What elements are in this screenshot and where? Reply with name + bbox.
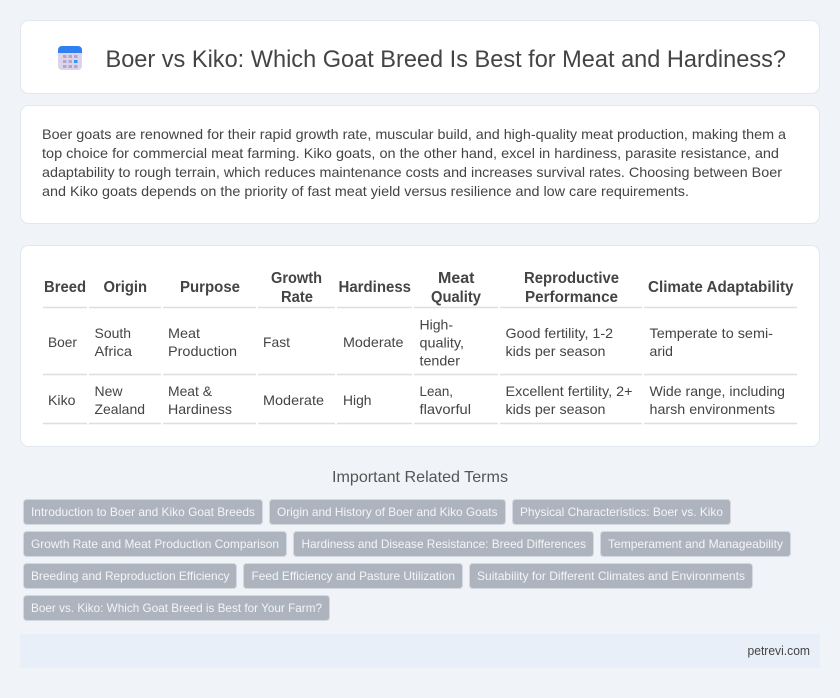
table row: Boer: Fast bbox=[263, 334, 290, 350]
footer source text: petrevi.com bbox=[748, 644, 810, 658]
table header: Quality bbox=[431, 289, 481, 306]
table row: Kiko: flavorful bbox=[420, 401, 471, 417]
text block: summary: Boer goats are renowned for their rapid growth rate, muscular build, and high-quality meat production, making them a bbox=[42, 126, 786, 142]
text block: summary: and Kiko goats depends on the priority of fast meat yield versus resilience and low care requirements. bbox=[42, 183, 689, 199]
icon: calendar bbox=[58, 46, 82, 70]
table row: Kiko bbox=[48, 383, 785, 417]
table row: Boer: Boer bbox=[48, 334, 77, 350]
table header: Origin bbox=[104, 279, 147, 296]
table row: Kiko: Lean, bbox=[420, 383, 453, 399]
table row: Boer: Moderate bbox=[343, 334, 404, 350]
table row: Kiko: High bbox=[343, 392, 372, 408]
tag list: related terms: Suitability for Different Climates and Environments bbox=[477, 569, 745, 583]
heading: related terms: Important Related Terms bbox=[332, 469, 508, 486]
title: Boer vs Kiko: Which Goat Breed Is Best for Meat and Hardiness? bbox=[106, 46, 786, 73]
tag list: related terms: Boer vs. Kiko: Which Goat Breed is Best for Your Farm? bbox=[31, 601, 322, 615]
table row: Boer: Production bbox=[168, 343, 237, 359]
table header: Hardiness bbox=[338, 279, 411, 296]
table row: Kiko: Hardiness bbox=[168, 401, 232, 417]
table row: Boer bbox=[48, 316, 773, 368]
table row: Boer: Meat bbox=[168, 325, 200, 341]
table header: Breed bbox=[44, 279, 86, 296]
text block: summary: adaptability to rough terrain, which reduces maintenance costs and increases survival rates. Choosing between Boer bbox=[42, 164, 782, 180]
table row: Boer: quality, bbox=[420, 334, 464, 350]
tag list: related terms: Feed Efficiency and Pasture Utilization bbox=[252, 569, 455, 583]
tag list: related terms: Origin and History of Boer and Kiko Goats bbox=[277, 505, 498, 519]
footer bar bbox=[20, 634, 820, 668]
tag list: related terms: Hardiness and Disease Resistance: Breed Differences bbox=[302, 537, 586, 551]
text block: summary: top choice for commercial meat farming. Kiko goats, on the other hand, excel in hardiness, parasite resistance, and bbox=[42, 145, 779, 161]
table row: Boer: Temperate to semi- bbox=[650, 325, 773, 341]
table header bbox=[44, 270, 794, 306]
table row: Boer: South bbox=[94, 325, 131, 341]
table row: Kiko: Wide range, including bbox=[650, 383, 785, 399]
table header: Rate bbox=[281, 289, 313, 306]
text block: summary bbox=[42, 126, 786, 199]
panel: summary paragraph bbox=[20, 106, 820, 224]
table header: Performance bbox=[525, 289, 618, 306]
table row: Kiko: harsh environments bbox=[650, 401, 775, 417]
table row: Kiko: Kiko bbox=[48, 392, 76, 408]
table row: Boer: tender bbox=[420, 352, 460, 368]
tag list: related terms: Introduction to Boer and Kiko Goat Breeds bbox=[31, 505, 255, 519]
table row: Kiko: Moderate bbox=[263, 392, 324, 408]
table header: Climate Adaptability bbox=[648, 279, 794, 296]
table header: Meat bbox=[438, 270, 474, 287]
table row: Boer: High- bbox=[420, 316, 453, 332]
panel: title card bbox=[20, 20, 820, 94]
panel: comparison table bbox=[20, 246, 820, 446]
table row: Kiko: New bbox=[94, 383, 123, 399]
table row: Boer: Africa bbox=[94, 343, 132, 359]
table row: Kiko: kids per season bbox=[506, 401, 606, 417]
tag list: related terms: Physical Characteristics: Boer vs. Kiko bbox=[520, 505, 723, 519]
table row: Kiko: Zealand bbox=[94, 401, 145, 417]
tag list: related terms bbox=[24, 500, 790, 620]
tag list: related terms: Temperament and Manageability bbox=[608, 537, 783, 551]
table header: Growth bbox=[271, 270, 322, 287]
table row: Boer: arid bbox=[650, 343, 673, 359]
table row: Boer: Good fertility, 1-2 bbox=[506, 325, 613, 341]
table header: Reproductive bbox=[524, 270, 619, 287]
table row: Kiko: Meat & bbox=[168, 383, 213, 399]
tag list: related terms: Breeding and Reproduction Efficiency bbox=[31, 569, 230, 583]
table row: Boer: kids per season bbox=[506, 343, 606, 359]
table header: Purpose bbox=[180, 279, 240, 296]
table row: Kiko: Excellent fertility, 2+ bbox=[506, 383, 632, 399]
tag list: related terms: Growth Rate and Meat Production Comparison bbox=[31, 537, 279, 551]
